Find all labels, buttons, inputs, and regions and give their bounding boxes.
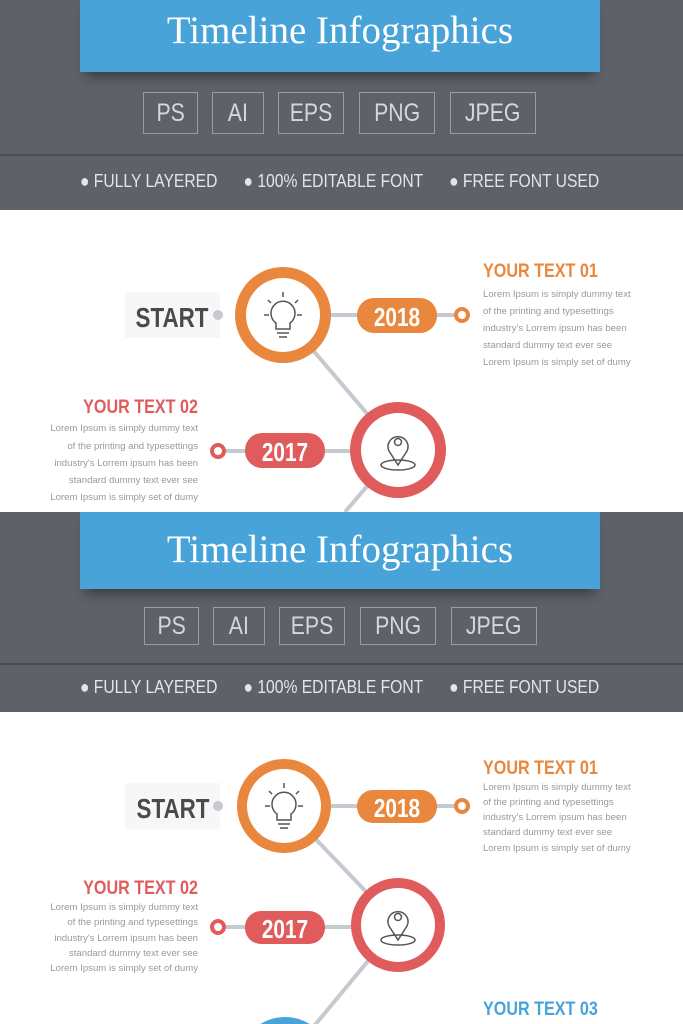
text block 02: Lorem Ipsum is simply set of dumy — [50, 963, 198, 974]
format box PNG: PNG — [375, 612, 421, 640]
format box PNG: PNG — [374, 99, 420, 127]
format box AI: AI — [228, 99, 248, 127]
timeline section 2 — [50, 757, 631, 1024]
text block 02: industry's Lorrem ipsum has been — [54, 933, 198, 944]
connectors — [218, 806, 462, 1024]
text block 01: Lorem Ipsum is simply dummy text — [483, 289, 631, 300]
text block 02: of the printing and typesettings — [67, 441, 198, 452]
pill 2018: 2018 — [374, 794, 420, 823]
format box PNG — [359, 92, 435, 134]
pill 2018 — [357, 790, 468, 823]
text block 01: industry's Lorrem ipsum has been — [483, 812, 627, 823]
format box EPS — [278, 92, 344, 134]
feature bullets 2: ● FULLY LAYERED ● 100% EDITABLE FONT ● FREE FONT USED — [80, 677, 599, 697]
title banner 1: Timeline Infographics — [167, 9, 513, 52]
pill 2017: 2017 — [262, 915, 308, 944]
feature bullets 1: ● FULLY LAYERED ● 100% EDITABLE FONT ● FREE FONT USED — [80, 171, 599, 191]
text block 01: Lorem Ipsum is simply dummy text — [483, 782, 631, 793]
text block 01: of the printing and typesettings — [483, 797, 614, 808]
connectors — [218, 315, 462, 512]
header section 2 — [0, 512, 683, 712]
start label — [125, 292, 223, 338]
text block 02 — [50, 877, 198, 974]
text block 02: standard dummy text ever see — [69, 475, 198, 486]
start label: START — [136, 303, 209, 334]
format box EPS: EPS — [291, 612, 333, 640]
format box AI — [212, 92, 264, 134]
header section 1 — [0, 0, 683, 210]
format box JPEG: JPEG — [465, 99, 521, 127]
text block 01: YOUR TEXT 01 — [483, 757, 598, 778]
pill 2017 — [212, 433, 325, 468]
title banner 1 — [80, 0, 600, 72]
text block 01: YOUR TEXT 01 — [483, 260, 598, 281]
format box JPEG — [451, 607, 537, 645]
text block 01: Lorem Ipsum is simply set of dumy — [483, 357, 631, 368]
format box AI — [213, 607, 265, 645]
text block 02: of the printing and typesettings — [67, 917, 198, 928]
title banner 2 — [80, 512, 600, 589]
format box JPEG — [450, 92, 536, 134]
pill 2018: 2018 — [374, 303, 420, 332]
text block 02: YOUR TEXT 02 — [83, 396, 198, 417]
start label — [125, 783, 223, 829]
text block 01: of the printing and typesettings — [483, 306, 614, 317]
text block 03 heading: YOUR TEXT 03 — [483, 998, 598, 1019]
text block 02: Lorem Ipsum is simply dummy text — [50, 902, 198, 913]
format box PS — [143, 92, 198, 134]
format box PNG — [360, 607, 436, 645]
start label: START — [137, 794, 210, 825]
timeline section 1 — [50, 260, 631, 512]
text block 01 — [483, 260, 631, 368]
text block 01: Lorem Ipsum is simply set of dumy — [483, 843, 631, 854]
text block 01: standard dummy text ever see — [483, 340, 612, 351]
format box JPEG: JPEG — [466, 612, 522, 640]
text block 01: standard dummy text ever see — [483, 827, 612, 838]
pill 2018 — [357, 298, 468, 333]
format box PS — [144, 607, 199, 645]
text block 02 — [50, 396, 198, 503]
circle 3 blue (partial) — [238, 1017, 332, 1024]
text block 01 — [483, 757, 631, 854]
format box PS: PS — [157, 612, 186, 640]
text block 02: Lorem Ipsum is simply dummy text — [50, 423, 198, 434]
circle 1 lightbulb — [237, 759, 331, 853]
circle 2 location — [350, 402, 446, 498]
text block 02: Lorem Ipsum is simply set of dumy — [50, 492, 198, 503]
text block 02: standard dummy text ever see — [69, 948, 198, 959]
text block 01: industry's Lorrem ipsum has been — [483, 323, 627, 334]
circle 1 lightbulb — [235, 267, 331, 363]
format box EPS: EPS — [290, 99, 332, 127]
text block 02: industry's Lorrem ipsum has been — [54, 458, 198, 469]
format box PS: PS — [156, 99, 185, 127]
circle 2 location — [351, 878, 445, 972]
title banner 2: Timeline Infographics — [167, 528, 513, 571]
format box AI: AI — [229, 612, 249, 640]
pill 2017 — [212, 911, 325, 944]
pill 2017: 2017 — [262, 438, 308, 467]
text block 02: YOUR TEXT 02 — [83, 877, 198, 898]
format box EPS — [279, 607, 345, 645]
